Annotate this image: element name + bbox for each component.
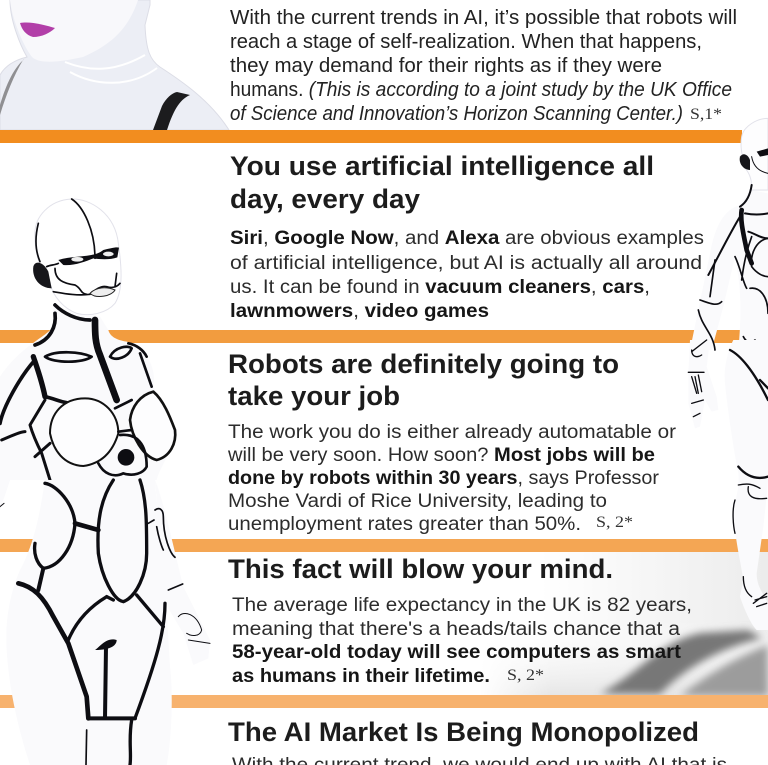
heading: everyday AI: You use artificial intelligence all [230, 151, 654, 181]
heading: AI market: The AI Market Is Being Monopolized [228, 717, 699, 747]
text block: robots and jobs: will be very soon. How soon? Most jobs will be [227, 445, 655, 466]
text block: robot rights: they may demand for their rights as if they were [230, 55, 662, 77]
text block: robot rights: humans. (This is according to a joint study by the UK Office [230, 79, 732, 101]
text block: everyday AI: lawnmowers , video games [230, 301, 489, 322]
text block: robots and jobs: unemployment rates greater than 50%. [228, 514, 581, 535]
text block: life expectancy: meaning that there's a heads/tails chance that a [232, 619, 680, 640]
text block: life expectancy: The average life expectancy in the UK is 82 years, [232, 595, 692, 616]
text block: life expectancy: 58-year-old today will see computers as smart [232, 642, 682, 663]
text block: robots and jobs: Moshe Vardi of Rice University, leading to [228, 491, 607, 512]
heading: robots and jobs: Robots are definitely going to [228, 349, 619, 379]
text block: everyday AI [230, 228, 704, 322]
text block: robots and jobs: S, 2* [596, 514, 633, 531]
text block: everyday AI: of artificial intelligence, but AI is actually all around [230, 253, 702, 274]
heading: blow your mind: This fact will blow your mind. [228, 554, 613, 584]
text block: everyday AI: Siri, Google Now , and Alexa are obvious examples [230, 228, 704, 249]
text block: robot rights: With the current trends in AI, it’s possible that robots will [230, 7, 737, 29]
text block: life expectancy: S, 2* [507, 667, 544, 684]
text block: robot rights: S,1* [690, 106, 722, 123]
background shading: floor and shadow [480, 552, 768, 696]
text block: life expectancy: as humans in their lifetime. [232, 666, 490, 687]
right robot figure [688, 118, 768, 630]
heading: robots and jobs: take your job [228, 381, 400, 411]
heading: everyday AI: day, every day [230, 184, 420, 214]
text block: life expectancy [232, 595, 692, 687]
text block: robot rights [230, 7, 737, 125]
text block: robots and jobs: The work you do is either already automatable or [228, 422, 677, 443]
text block: everyday AI: us. It can be found in vacuum cleaners , cars, [230, 277, 650, 298]
heading: robots and jobs [228, 349, 619, 411]
top robot figure [0, 0, 229, 130]
text block: robots and jobs [227, 422, 677, 535]
orange divider bars [0, 130, 768, 708]
left robot figure [0, 199, 210, 765]
heading: everyday AI [230, 151, 654, 214]
text block: robot rights: of Science and Innovation’s Horizon Scanning Center.) [230, 103, 683, 125]
text block: robot rights: reach a stage of self-realization. When that happens, [230, 31, 702, 53]
text block: robots and jobs: done by robots within 30 years , says Professor [228, 468, 660, 489]
